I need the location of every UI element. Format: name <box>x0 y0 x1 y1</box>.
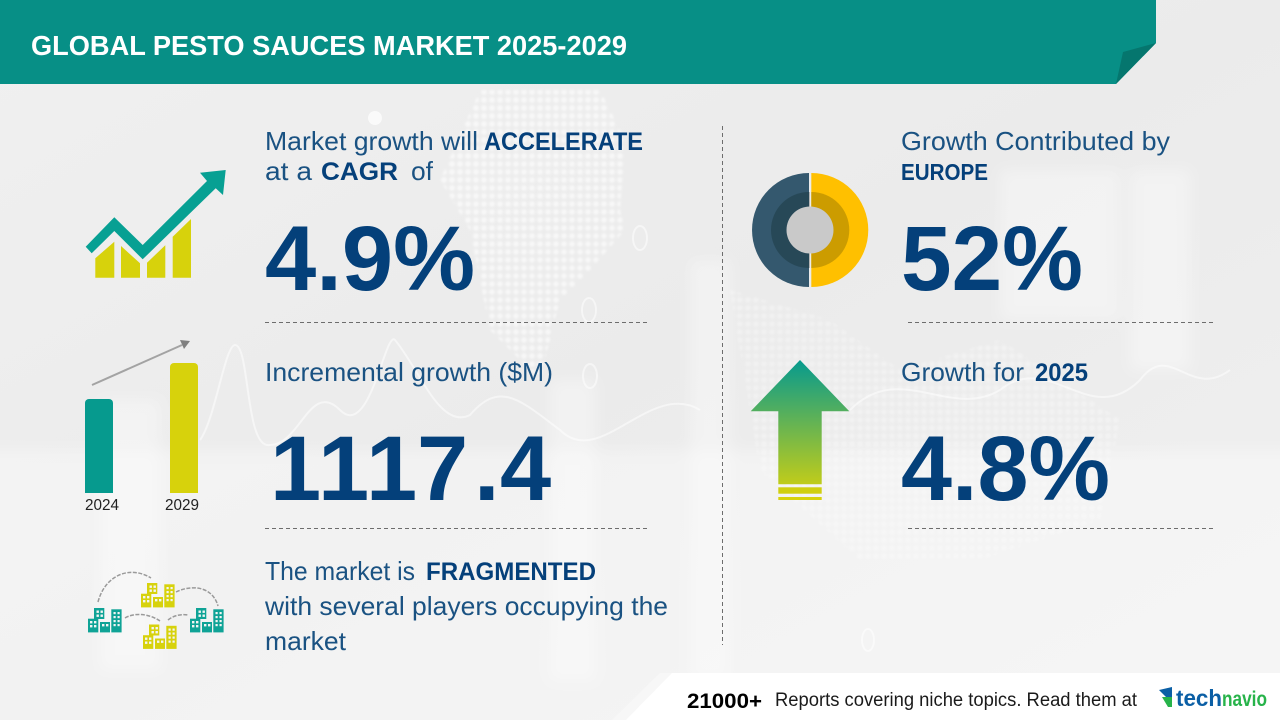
footer band <box>612 673 1280 720</box>
icon: donut for Europe share <box>752 173 868 287</box>
text: growth contributed heading: EUROPE <box>901 159 988 185</box>
footer: call to action: Reports covering niche topics. Read them at <box>775 690 1138 711</box>
title: GLOBAL PESTO SAUCES MARKET 2025-2029 <box>31 30 627 61</box>
text: fragmented market description: market <box>265 626 347 656</box>
header banner <box>0 0 1156 84</box>
text: growth for 2025 heading: 2025 <box>1035 359 1088 387</box>
text: growth for 2025 heading <box>901 357 1088 387</box>
text: market growth heading: CAGR <box>321 158 398 186</box>
text: market growth heading <box>265 126 643 186</box>
text: market growth heading: of <box>411 156 434 186</box>
logo: technavio: tech <box>1176 685 1222 711</box>
text: market growth heading: ACCELERATE <box>484 128 643 156</box>
text: incremental growth heading: Incremental growth ($M) <box>265 357 553 387</box>
icon: page fold <box>1116 43 1156 84</box>
text: fragmented market description <box>264 556 668 656</box>
icon: up arrow <box>751 360 849 500</box>
logo: technavio <box>1159 685 1267 711</box>
text: growth contributed heading <box>901 126 1170 185</box>
text: market growth heading: at a <box>265 156 313 186</box>
logo: technavio: navio <box>1222 688 1267 711</box>
dashed dividers <box>265 126 1214 645</box>
icon: fragmented market buildings <box>88 572 224 649</box>
text: fragmented market description: with several players occupying the <box>264 591 668 621</box>
text: growth for 2025 heading: Growth for <box>901 357 1024 387</box>
text: fragmented market description: FRAGMENTED <box>426 558 596 586</box>
stat: 2025 growth 4.8%: 4.8% <box>901 418 1110 520</box>
text: growth contributed heading: Growth Contributed by <box>901 126 1170 156</box>
stat: incremental growth 1117.4: 1117.4 <box>270 418 551 520</box>
stat: CAGR 4.9%: 4.9% <box>265 208 475 310</box>
text: fragmented market description: The market is <box>265 556 415 586</box>
footer: report count: 21000+ <box>687 690 762 713</box>
stat: Europe 52%: 52% <box>901 208 1083 310</box>
icon: growth chart with rising arrow <box>86 170 226 278</box>
icon: bar chart 2024 to 2029: 2024 <box>85 497 119 514</box>
text: market growth heading: Market growth will <box>265 126 478 156</box>
icon: bar chart 2024 to 2029 <box>85 340 199 514</box>
icon: bar chart 2024 to 2029: 2029 <box>165 497 199 514</box>
